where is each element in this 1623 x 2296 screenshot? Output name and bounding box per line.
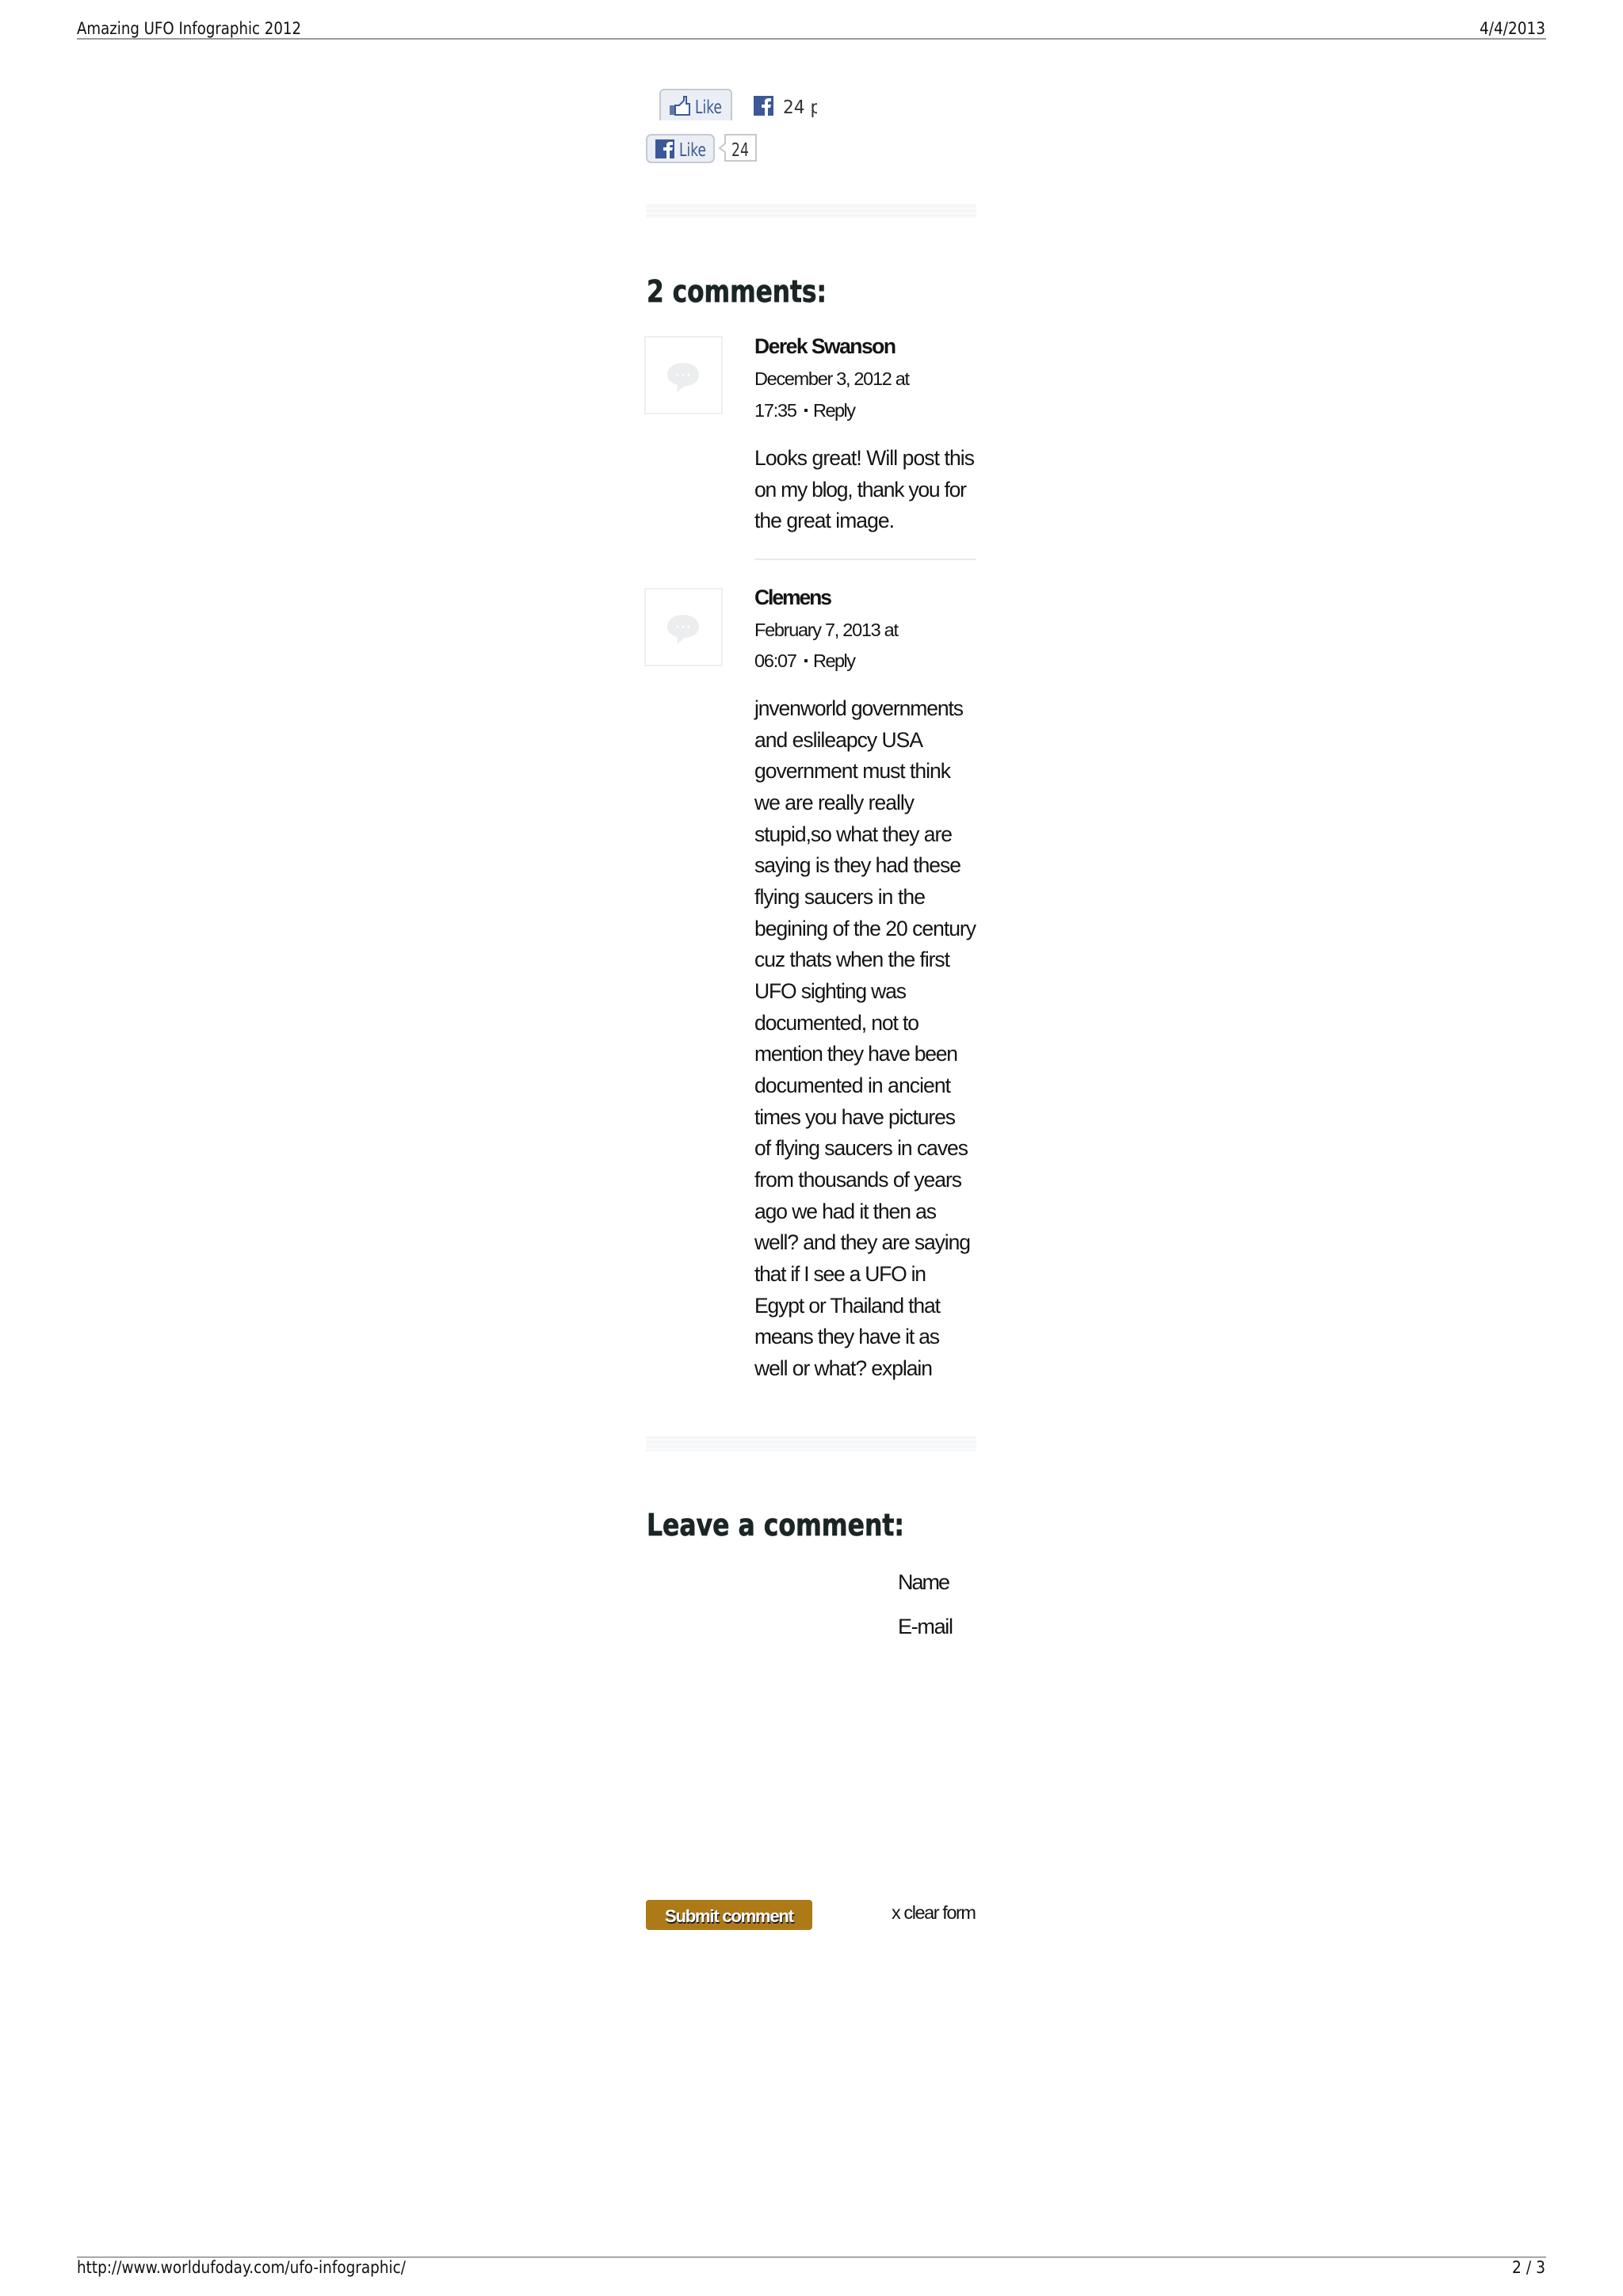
heading: leave a comment: Leave a comment: [647, 1508, 904, 1543]
avatar placeholder [645, 589, 722, 666]
divider [646, 1436, 976, 1451]
header date: 4/4/2013 [1480, 19, 1545, 38]
comment date: February 7, 2013 at [754, 620, 899, 640]
comment body: Looks great! Will post this [754, 446, 975, 470]
comment body: and eslileapcy USA [754, 728, 923, 752]
comment body [754, 446, 975, 532]
comment body: jnvenworld governments [754, 696, 964, 720]
comment date: Reply [813, 400, 856, 421]
comment body: ago we had it then as [754, 1199, 937, 1223]
comment date: Reply [813, 650, 856, 671]
comment body: Egypt or Thailand that [754, 1294, 941, 1318]
submit button [646, 1900, 812, 1930]
page footer [77, 2256, 1546, 2277]
page header [77, 19, 1546, 40]
comment body: stupid,so what they are [754, 822, 953, 846]
count box: 24 [731, 140, 749, 161]
comment body: means they have it as [754, 1325, 940, 1348]
comment body: saying is they had these [754, 853, 961, 877]
form label: name: Name [898, 1570, 950, 1594]
avatar placeholder [645, 337, 722, 414]
comment body: begining of the 20 century [754, 917, 977, 940]
submit button: Submit comment [665, 1906, 795, 1926]
comment body: well? and they are saying [754, 1230, 971, 1254]
comment date: December 3, 2012 at [754, 368, 910, 389]
comment body: cuz thats when the first [754, 948, 951, 971]
comment body: government must think [754, 759, 952, 783]
comment body: times you have pictures [754, 1105, 956, 1129]
like label: Like [695, 97, 722, 118]
heading: comments: 2 comments: [647, 274, 827, 309]
comment body: documented, not to [754, 1011, 919, 1035]
icon: thumbs up [670, 97, 689, 115]
icon: facebook square [754, 96, 773, 116]
comment body: documented in ancient [754, 1074, 952, 1097]
comment body: UFO sighting was [754, 979, 907, 1003]
form label: e-mail: E-mail [898, 1615, 953, 1638]
footer url: http://www.worldufoday.com/ufo-infographic/ [77, 2258, 407, 2277]
comment body: that if I see a UFO in [754, 1262, 926, 1286]
submit button: Submit comment [666, 1908, 796, 1928]
comment date: 17:35 [754, 400, 797, 421]
comment body: from thousands of years [754, 1168, 962, 1192]
comment date [754, 620, 899, 671]
like button clipped [659, 90, 731, 120]
clear form link: x clear form [892, 1902, 976, 1923]
header title: Amazing UFO Infographic 2012 [77, 19, 301, 38]
comment body: well or what? explain [754, 1356, 933, 1380]
comment 1 [645, 334, 975, 532]
comment date [754, 368, 910, 421]
facebook like button with count [647, 135, 756, 162]
comment body: of flying saucers in caves [754, 1136, 968, 1160]
commenter name: Clemens [754, 585, 832, 609]
comment 2 [645, 585, 977, 1380]
page number: 2 / 3 [1512, 2258, 1545, 2277]
like label: Like [679, 140, 706, 161]
commenter name: Derek Swanson [754, 334, 896, 358]
comment body: we are really really [754, 791, 915, 814]
comment body: the great image. [754, 509, 895, 532]
comment body: flying saucers in the [754, 885, 926, 909]
clipped people count: 24 people [783, 97, 869, 118]
divider [646, 204, 976, 219]
comment body: on my blog, thank you for [754, 478, 967, 502]
comment body: mention they have been [754, 1042, 958, 1066]
comment body [754, 696, 977, 1380]
icon: facebook square small [655, 139, 674, 158]
comment date: 06:07 [754, 650, 797, 671]
